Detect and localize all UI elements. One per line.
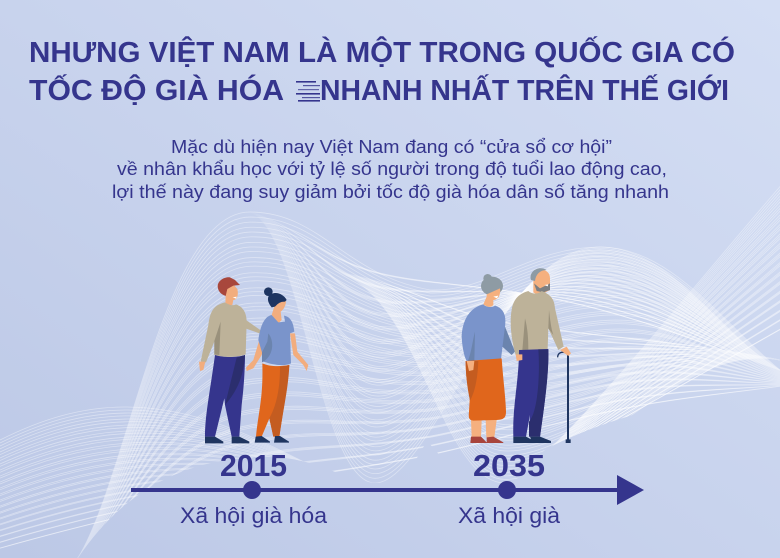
title: TỐC ĐỘ GIÀ HÓA — [29, 73, 284, 107]
subtitle: lợi thế này đang suy giảm bởi tốc độ già hóa dân số tăng nhanh — [112, 182, 669, 202]
year 2035: 2035 — [473, 448, 545, 483]
title — [29, 35, 735, 107]
subtitle: về nhân khẩu học với tỷ lệ số người trong độ tuổi lao động cao, — [117, 159, 667, 179]
label: aged society: Xã hội già — [458, 503, 561, 528]
illustration: young couple 2015 — [199, 277, 308, 443]
subtitle — [112, 137, 669, 202]
year 2015: 2015 — [220, 448, 287, 483]
illustration: elderly couple 2035 — [462, 268, 571, 443]
wave line pattern — [0, 175, 780, 558]
title: NHƯNG VIỆT NAM LÀ MỘT TRONG QUỐC GIA CÓ — [29, 35, 735, 69]
subtitle: Mặc dù hiện nay Việt Nam đang có “cửa sổ cơ hội” — [171, 137, 612, 157]
timeline arrow — [131, 475, 644, 505]
title: NHANH NHẤT TRÊN THẾ GIỚI — [320, 73, 729, 107]
label: aging society: Xã hội già hóa — [180, 503, 328, 528]
icon: speed lines — [296, 81, 320, 102]
